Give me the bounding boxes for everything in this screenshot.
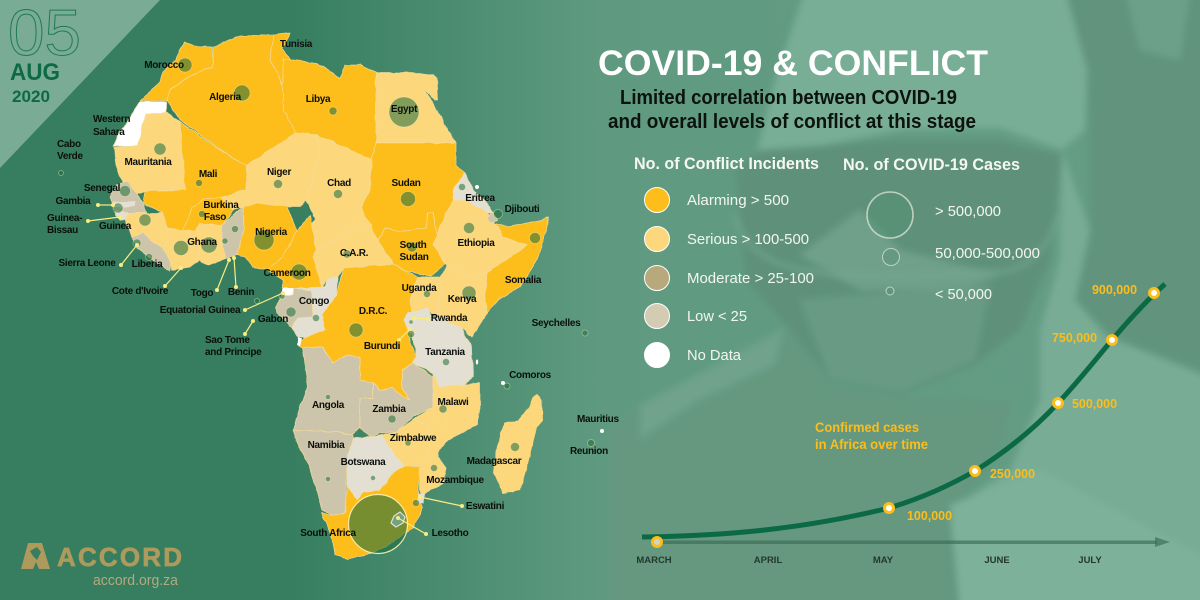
country labels: Burundi	[364, 341, 401, 352]
legend: conflict incidents: No Data	[687, 347, 742, 364]
data points	[652, 288, 1158, 546]
cases curve	[642, 284, 1165, 537]
country labels: Mali	[199, 169, 218, 180]
legend: conflict incidents: No. of Conflict Incidents	[634, 154, 819, 173]
country: South Africa	[322, 465, 423, 559]
country labels: Sao Tome	[205, 335, 250, 346]
country labels: Botswana	[341, 457, 386, 468]
country: Morocco	[140, 42, 213, 101]
country: Algeria	[167, 35, 296, 165]
subtitle: Limited correlation between COVID-19	[620, 87, 957, 109]
country labels: Faso	[204, 212, 226, 223]
country: Sudan	[361, 143, 465, 240]
leader lines for small countries	[86, 203, 464, 536]
country labels: Cabo	[57, 139, 81, 150]
country labels: Togo	[191, 288, 213, 299]
legend: conflict incidents	[634, 154, 819, 368]
country labels: Seychelles	[532, 318, 581, 329]
country labels: Benin	[228, 287, 254, 298]
country: Mozambique	[413, 373, 480, 497]
country: Guinea-Bissau	[115, 210, 128, 220]
country labels: Tanzania	[425, 347, 466, 358]
country: Niger	[220, 133, 320, 210]
country: Togo and Benin	[222, 207, 244, 258]
data labels	[907, 282, 1137, 523]
country labels: Gabon	[258, 314, 288, 325]
country: Namibia	[293, 430, 353, 515]
country labels: Senegal	[84, 183, 121, 194]
country labels: Mauritania	[124, 157, 172, 168]
country labels: Madagascar	[467, 456, 522, 467]
country: Kenya	[437, 265, 487, 337]
Lesotho	[391, 512, 405, 527]
country: Cabinda	[297, 337, 302, 346]
legend: conflict incidents: Serious > 100-500	[687, 231, 809, 248]
month labels: JUNE	[984, 555, 1010, 566]
country: Eswatini	[417, 493, 425, 504]
country labels: Angola	[312, 400, 345, 411]
country labels: Guinea-	[47, 213, 82, 224]
country labels: Morocco	[144, 60, 184, 71]
country labels: Zimbabwe	[390, 433, 437, 444]
country labels: Western	[93, 114, 130, 125]
country: Tanzania	[412, 317, 473, 388]
country labels: Nigeria	[255, 227, 288, 238]
legend: conflict incidents: Low < 25	[687, 308, 747, 325]
country labels: Zambia	[372, 404, 406, 415]
COVID-19 case bubbles	[58, 58, 594, 554]
country: Malawi	[433, 395, 447, 428]
country: Nigeria	[237, 203, 297, 270]
country: Zimbabwe	[382, 420, 430, 467]
month labels	[636, 555, 1102, 566]
country labels: Reunion	[570, 446, 608, 457]
country labels: Rwanda	[431, 313, 468, 324]
country labels: South Africa	[300, 528, 356, 539]
country: Zambia	[360, 363, 433, 437]
country: Cote d'Ivoire	[163, 223, 200, 270]
date	[8, 0, 81, 106]
month labels: APRIL	[754, 555, 782, 566]
data labels: 900,000	[1092, 282, 1137, 297]
country: Chad	[306, 135, 372, 250]
month labels: MARCH	[636, 555, 672, 566]
country labels: Libya	[306, 94, 331, 105]
country labels: Verde	[57, 151, 83, 162]
country labels: Sudan	[391, 178, 421, 189]
country labels: Tunisia	[280, 39, 313, 50]
country labels: Guinea	[99, 221, 132, 232]
legend: COVID-19 cases: < 50,000	[935, 286, 992, 303]
date corner triangle	[0, 0, 160, 168]
country labels: Malawi	[438, 397, 469, 408]
time axis arrow	[657, 537, 1170, 547]
subtitle	[608, 87, 976, 133]
country labels: Ghana	[187, 237, 218, 248]
country: Rwanda and Burundi	[404, 308, 432, 336]
country: Tunisia	[270, 33, 290, 85]
country: Uganda	[410, 277, 443, 317]
country: Mauritania	[114, 112, 185, 195]
country: Madagascar	[493, 393, 543, 494]
country: Senegal	[110, 182, 147, 213]
country labels: Sahara	[93, 127, 125, 138]
legend: COVID-19 cases	[843, 155, 1040, 303]
legend: conflict incidents: Alarming > 500	[687, 192, 789, 209]
country labels: Algeria	[209, 92, 242, 103]
country: Ghana	[199, 223, 225, 265]
country labels: Egypt	[391, 104, 418, 115]
month labels: MAY	[873, 555, 894, 566]
country: C.A.R.	[313, 223, 393, 288]
country labels: Congo	[299, 296, 329, 307]
country: Gambia	[113, 201, 135, 207]
small islands	[475, 185, 604, 433]
country labels: Djibouti	[505, 204, 540, 215]
month labels: JULY	[1078, 555, 1102, 566]
date: AUG	[10, 59, 60, 86]
legend: COVID-19 cases: 50,000-500,000	[935, 245, 1040, 262]
country labels: Kenya	[448, 294, 477, 305]
country: Djibouti	[487, 212, 498, 223]
country: Cameroon	[267, 215, 322, 288]
country: Western Sahara	[113, 102, 166, 147]
logo: ACCORD: ACCORD	[57, 542, 182, 572]
map of Africa by conflict level	[110, 33, 548, 559]
chart caption	[815, 419, 928, 452]
country: Burkina Faso	[183, 197, 233, 231]
country: Mali	[143, 122, 247, 230]
date: 2020	[12, 87, 50, 106]
country labels: Niger	[267, 167, 291, 178]
data labels: 750,000	[1052, 330, 1097, 345]
country: Guinea	[125, 213, 168, 248]
country labels: Lesotho	[432, 528, 469, 539]
country: Equatorial Guinea	[282, 288, 293, 295]
country labels: Uganda	[402, 283, 437, 294]
country: Eritrea	[453, 173, 493, 213]
chart caption: Confirmed cases	[815, 419, 919, 435]
subtitle: and overall levels of conflict at this stage	[608, 111, 976, 133]
country: Libya	[283, 60, 376, 160]
country labels: and Principe	[205, 347, 262, 358]
country labels: Sierra Leone	[59, 258, 116, 269]
country labels: Namibia	[308, 440, 345, 451]
country labels: Gambia	[56, 196, 91, 207]
country: Botswana	[347, 435, 405, 500]
legend: COVID-19 cases: No. of COVID-19 Cases	[843, 155, 1020, 174]
chart: confirmed cases in Africa over time	[636, 282, 1170, 566]
country labels: Liberia	[132, 259, 163, 270]
country: Egypt	[376, 73, 456, 143]
country: Sierra Leone and Liberia	[132, 232, 172, 271]
country labels: Bissau	[47, 225, 78, 236]
country: South Sudan	[378, 213, 446, 276]
legend: conflict incidents: Moderate > 25-100	[687, 270, 814, 287]
country: Gabon	[275, 288, 313, 327]
country labels: Sudan	[399, 252, 429, 263]
logo: ACCORD: accord.org.za	[93, 572, 179, 589]
country labels: Eswatini	[466, 501, 505, 512]
country: D.R.C.	[298, 264, 418, 400]
country: Somalia	[485, 217, 548, 313]
data labels: 100,000	[907, 508, 952, 523]
country: Congo	[292, 277, 338, 338]
data labels: 500,000	[1072, 396, 1117, 411]
country labels: South	[400, 240, 427, 251]
logo: ACCORD	[21, 542, 182, 589]
country labels: Mozambique	[426, 475, 485, 486]
country labels: C.A.R.	[340, 248, 369, 259]
country labels: D.R.C.	[359, 306, 388, 317]
country labels: Burkina	[203, 200, 239, 211]
country labels	[47, 39, 619, 539]
data labels: 250,000	[990, 466, 1035, 481]
country: Angola	[293, 347, 373, 435]
country labels: Cote d'Ivoire	[112, 286, 169, 297]
chart caption: in Africa over time	[815, 436, 928, 452]
country labels: Eritrea	[465, 193, 496, 204]
title: COVID-19 & CONFLICT	[598, 44, 988, 83]
country labels: Chad	[327, 178, 351, 189]
legend: COVID-19 cases: > 500,000	[935, 203, 1001, 220]
country labels: Somalia	[505, 275, 542, 286]
country: Ethiopia	[433, 200, 527, 277]
country labels: Cameroon	[263, 268, 311, 279]
country labels: Comoros	[509, 370, 552, 381]
country labels: Equatorial Guinea	[160, 305, 241, 316]
country labels: Ethiopia	[457, 238, 495, 249]
country labels: Mauritius	[577, 414, 619, 425]
